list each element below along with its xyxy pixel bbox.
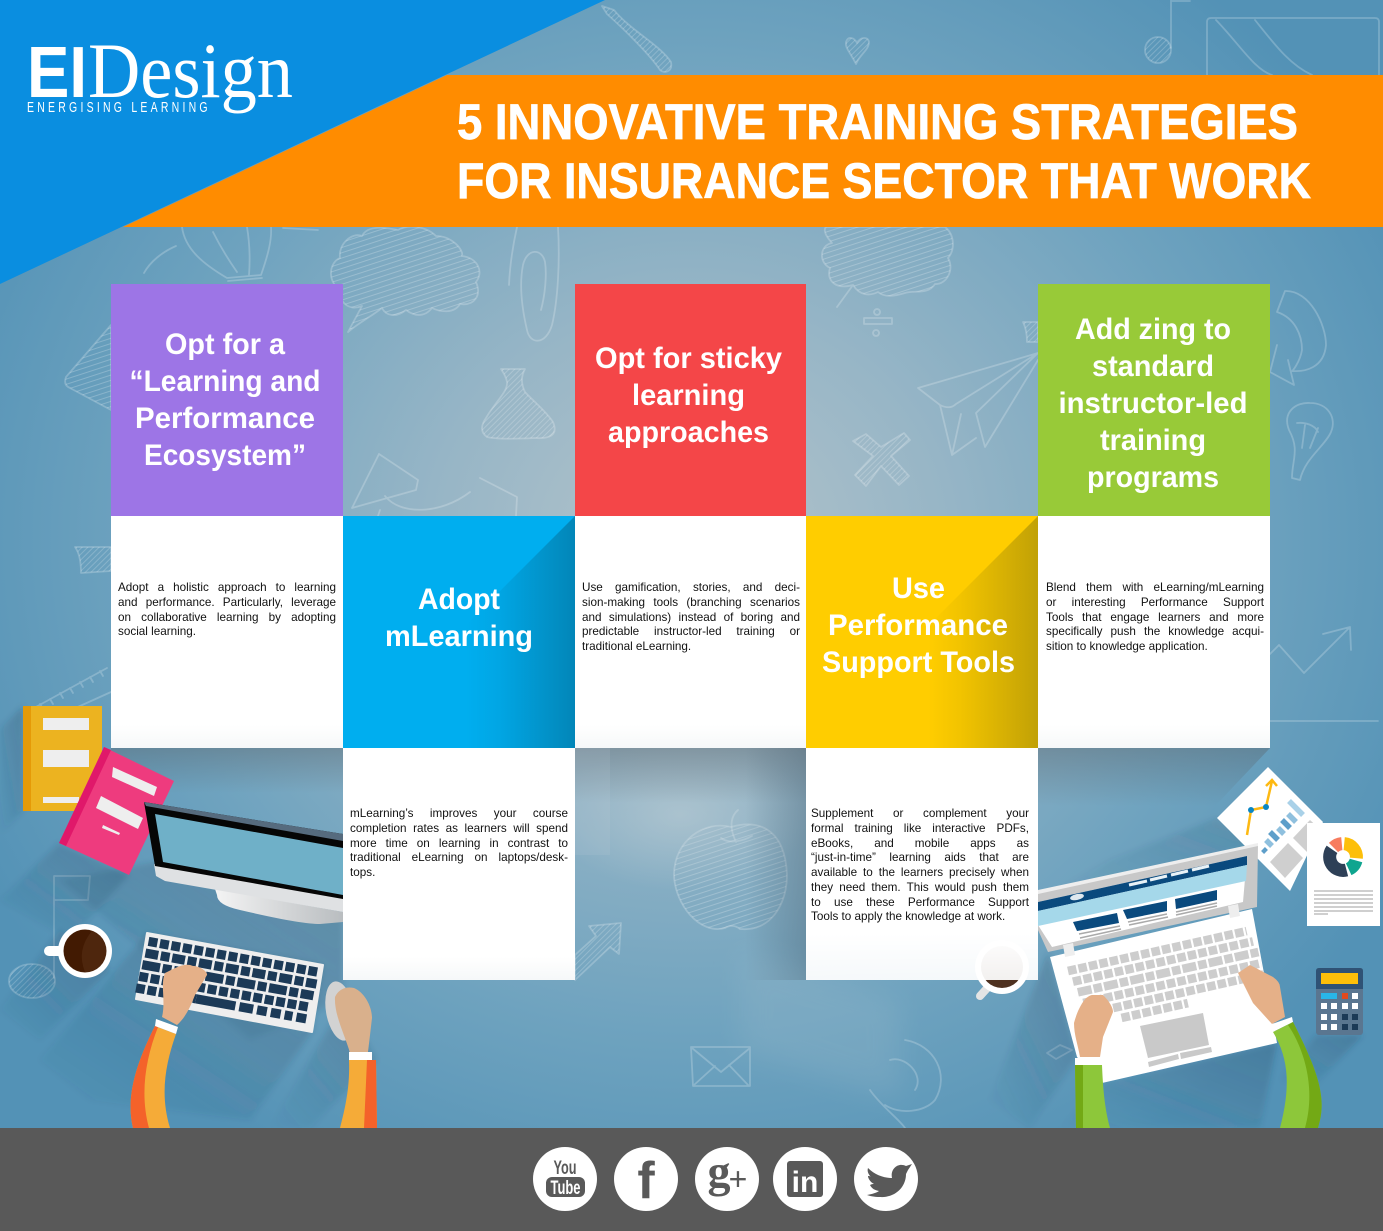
logo: Design — [88, 27, 293, 114]
panel: learning and performance ecosystem heading — [111, 284, 343, 516]
text: performance support description: they need them. This would push them — [811, 881, 1029, 894]
illustration: keyboard — [136, 933, 323, 1032]
icon: LinkedIn — [773, 1147, 837, 1211]
laptop keys — [1068, 930, 1266, 1027]
logo: EI — [27, 33, 87, 113]
doodle: music note two — [9, 876, 90, 998]
text: ecosystem description: and performance. Particularly, leverage — [118, 596, 336, 609]
text: performance support description: formal training like interactive PDFs, — [811, 822, 1029, 835]
panel: sticky learning heading — [575, 284, 806, 516]
illustration: donut chart document — [1307, 823, 1380, 926]
panel: learning and performance ecosystem heading: Opt for a — [165, 328, 285, 361]
panel: adopt mLearning heading — [343, 516, 575, 748]
title — [457, 94, 1311, 209]
social icons — [533, 1146, 918, 1211]
doodle: multiply — [853, 433, 910, 486]
header orange banner — [123, 75, 1383, 227]
illustration: laptop — [1038, 843, 1322, 1128]
icon: Facebook — [614, 1147, 678, 1211]
doodle: pen — [602, 6, 671, 72]
doodle: book — [65, 325, 111, 410]
panel: performance support tools heading: Use — [892, 572, 945, 605]
illustration: coffee cup — [44, 924, 112, 978]
footer bar — [0, 1128, 1383, 1231]
doodle: paperclip — [509, 227, 559, 341]
logo: ENERGISING LEARNING — [27, 98, 208, 115]
panel: add zing heading: training — [1100, 424, 1206, 457]
doodle: small square — [1023, 322, 1038, 342]
illustration: yellow book — [23, 706, 102, 811]
panel: sticky learning description background — [575, 516, 806, 748]
doodle: globe — [870, 1040, 941, 1128]
panel: performance support description background — [806, 748, 1038, 980]
doodle: growth arrow — [1270, 627, 1351, 673]
text: ecosystem description: social learning. — [118, 625, 196, 638]
header blue triangle — [0, 0, 605, 284]
trackpad — [1140, 1013, 1212, 1067]
illustration: monitor — [144, 802, 343, 924]
laptop hands and sleeves — [1074, 965, 1322, 1128]
text: sticky learning description — [582, 581, 800, 653]
illustration: report sheet — [1217, 767, 1323, 891]
text: add zing description: Blend them with eLearning/mLearning — [1046, 581, 1264, 594]
text: add zing description: sition to knowledge application. — [1046, 640, 1208, 653]
doodle: light bulb two — [1287, 403, 1333, 480]
doodle: flask — [482, 369, 555, 439]
title: 5 INNOVATIVE TRAINING STRATEGIES — [457, 94, 1298, 150]
text: sticky learning description: and simulations) instead of boring and — [582, 610, 800, 624]
text: mLearning description: completion rates as learners will spend — [350, 822, 568, 835]
doodle: pen nib — [1047, 1045, 1072, 1059]
panel: add zing heading — [1038, 284, 1270, 516]
doodle: ruler — [34, 668, 111, 715]
illustration: calculator — [1316, 968, 1363, 1035]
doodle: music note — [1145, 0, 1190, 63]
icon: YouTube: Tube — [550, 1178, 580, 1199]
long shadows under illustrations — [0, 706, 1363, 1128]
text: performance support description — [811, 807, 1029, 923]
doodle: cloud — [331, 227, 480, 332]
panel: add zing heading: Add zing to — [1075, 313, 1231, 346]
icon: LinkedIn: in — [792, 1166, 818, 1199]
laptop screen — [1038, 843, 1258, 957]
text: mLearning description: more time on learning in contrast to — [350, 836, 568, 850]
doodle: baseline — [1270, 720, 1378, 722]
doodle: arrow — [352, 454, 517, 516]
text: performance support description: eBooks, and mobile apps as — [811, 836, 1029, 850]
text: performance support description: Tools to apply the knowledge at work. — [811, 910, 1005, 923]
text: ecosystem description — [118, 581, 336, 638]
laptop base — [1050, 909, 1277, 1083]
doodle: screen — [1207, 18, 1379, 75]
tile drop shadows — [111, 740, 1270, 1100]
panel: learning and performance ecosystem heading: “Learning and — [130, 365, 320, 398]
text: mLearning description: mLearning’s improves your course — [350, 807, 568, 820]
panel: sticky learning heading: learning — [632, 379, 745, 412]
panel: performance support tools heading: Support Tools — [822, 646, 1015, 679]
panel: mLearning description background — [343, 748, 575, 980]
icon: Google Plus: + — [729, 1161, 747, 1197]
icon: Facebook: f — [637, 1152, 655, 1210]
text: sticky learning description: traditional eLearning. — [582, 640, 691, 653]
text: mLearning description: tops. — [350, 866, 375, 879]
text: sticky learning description: predictable instructor-led training or — [582, 625, 800, 638]
doodle: envelope — [691, 1047, 750, 1086]
text: performance support description: Supplement or complement your — [811, 807, 1029, 820]
doodle: apple — [674, 824, 787, 929]
doodle: apple stem — [721, 810, 752, 842]
text: ecosystem description: on collaborative learning by adopting — [118, 610, 336, 624]
panel: add zing heading: instructor-led — [1058, 387, 1248, 420]
panel: add zing description background — [1038, 516, 1270, 748]
text: add zing description: Tools that engage learners and more — [1046, 610, 1264, 624]
text: performance support description: “just-in-time” learning aids that are — [811, 851, 1029, 864]
text: performance support description: to use these Performance Support — [811, 896, 1029, 908]
title: FOR INSURANCE SECTOR THAT WORK — [457, 153, 1311, 209]
panel: add zing heading: standard — [1092, 350, 1214, 383]
illustration: pink book — [59, 747, 174, 875]
doodle: paper plane — [918, 353, 1038, 455]
text: add zing description: specifically push the knowledge acqui- — [1046, 625, 1264, 638]
panel: ecosystem description background — [111, 516, 343, 748]
icon: YouTube — [533, 1147, 597, 1211]
panel: performance support tools heading — [806, 516, 1038, 748]
icon: Twitter — [854, 1147, 918, 1211]
doodle: heart — [846, 38, 869, 64]
text: add zing description — [1046, 581, 1264, 653]
panel: sticky learning heading: approaches — [608, 416, 769, 449]
panel: learning and performance ecosystem heading: Ecosystem” — [144, 439, 306, 472]
panel: adopt mLearning heading: mLearning — [385, 620, 533, 653]
text: sticky learning description: sion-making tools (branching scenarios — [582, 596, 800, 609]
panel: adopt mLearning heading: Adopt — [418, 583, 500, 616]
text: sticky learning description: Use gamification, stories, and deci- — [582, 581, 800, 594]
doodle: cloud two — [822, 227, 953, 307]
text: ecosystem description: Adopt a holistic approach to learning — [118, 581, 336, 594]
text: performance support description: available to the learners precisely when — [811, 866, 1029, 879]
text: mLearning description — [350, 807, 568, 879]
doodle: up arrow — [575, 923, 621, 980]
illustration: left arm and hand — [131, 965, 207, 1128]
illustration: mouse and right hand — [321, 979, 377, 1128]
icon: YouTube: You — [554, 1158, 576, 1179]
doodle: banner — [75, 547, 111, 573]
icon: Google Plus: g — [708, 1146, 730, 1197]
panel: add zing heading: programs — [1087, 461, 1219, 494]
doodle: light bulb — [144, 227, 318, 281]
panel: sticky learning heading: Opt for sticky — [595, 342, 782, 375]
icon: Google Plus — [695, 1146, 759, 1211]
doodle: divide — [864, 309, 892, 336]
illustration: second coffee cup — [975, 940, 1029, 996]
panel: performance support tools heading: Performance — [828, 609, 1008, 642]
text: add zing description: or interesting Performance Support — [1046, 596, 1264, 609]
doodle: curved arrow — [1270, 291, 1326, 385]
panel: learning and performance ecosystem heading: Performance — [135, 402, 315, 435]
text: mLearning description: traditional eLearning on laptops/desk- — [350, 851, 568, 864]
